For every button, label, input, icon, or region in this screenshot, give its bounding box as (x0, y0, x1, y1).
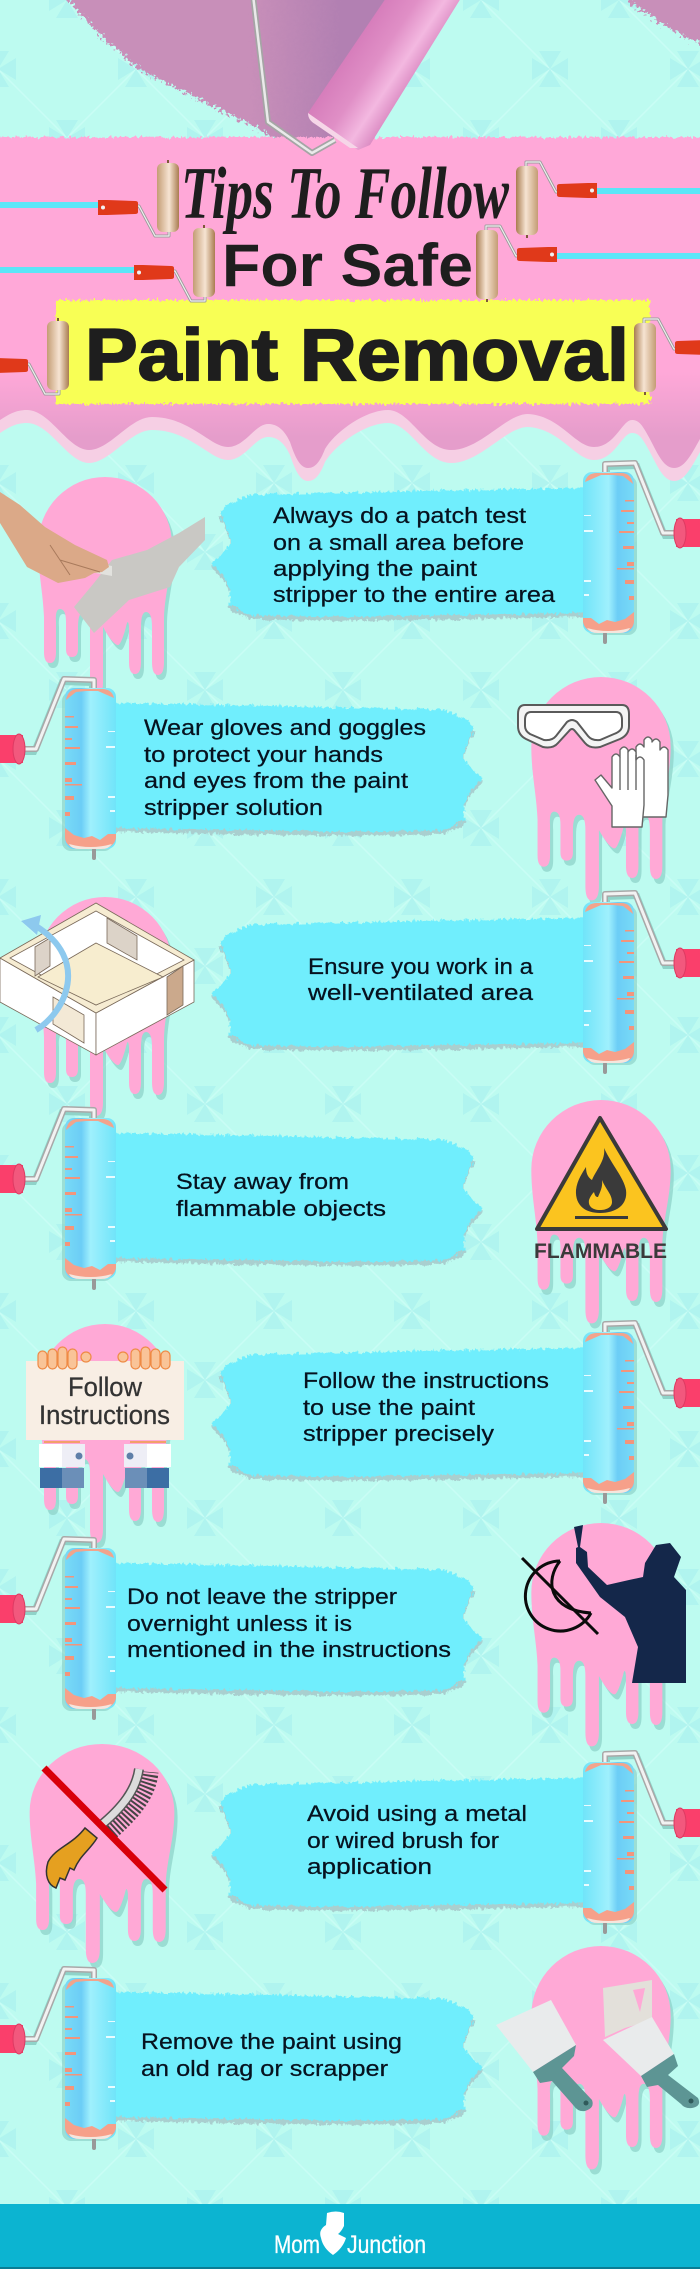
icon: sign held by hands (26, 1347, 184, 1488)
header pink band with drips (0, 137, 700, 481)
paint roller (0, 679, 116, 858)
paint splat (531, 677, 674, 905)
tip text: Remove the paint using (141, 2029, 402, 2054)
tip text (176, 1169, 386, 1221)
icon: wire brush (46, 1769, 150, 1888)
brush banner (211, 488, 587, 621)
title rollers (0, 160, 700, 395)
paint splat (531, 1100, 674, 1328)
paint splat (38, 897, 175, 1121)
icon: painter silhouette (574, 1525, 686, 1683)
tip text: stripper solution (144, 795, 323, 820)
paint roller (583, 463, 700, 642)
icon: flammable sign (537, 1118, 666, 1229)
tip text (273, 503, 556, 607)
icon: sign held by hands: Follow (68, 1372, 142, 1402)
panel: tip 4 flammable (0, 1100, 674, 1328)
logo: MomJunction: Junction (347, 2231, 426, 2259)
tip text: to protect your hands (144, 742, 383, 767)
paint roller (583, 893, 700, 1072)
icon: red cross line (44, 1768, 165, 1890)
tip text (307, 954, 534, 1005)
icon: goggles (518, 705, 629, 748)
tip text: to use the paint (303, 1395, 475, 1420)
panel: tip 6 overnight (0, 1523, 686, 1751)
tip text: applying the paint (273, 556, 477, 581)
title (85, 153, 629, 396)
paint roller (0, 1109, 116, 1288)
tip text: mentioned in the instructions (127, 1637, 451, 1662)
tip text (127, 1584, 451, 1662)
logo: MomJunction: Mom (274, 2231, 320, 2259)
tip text: overnight unless it is (127, 1611, 352, 1636)
blue lines behind title rollers (0, 188, 700, 273)
big paint roller (253, 0, 461, 153)
paint splat (531, 1523, 674, 1751)
brush banner (211, 1778, 587, 1911)
brush banner (211, 918, 587, 1051)
tip text: on a small area before (273, 530, 524, 555)
icon: scrapers (496, 1980, 699, 2111)
paint roller (0, 1969, 116, 2148)
paint roller (0, 1539, 116, 1718)
tip text (141, 2029, 402, 2081)
logo: MomJunction (274, 2212, 426, 2259)
tip text: well-ventilated area (307, 980, 534, 1005)
icon: ventilated room (0, 903, 194, 1055)
brush banner (211, 1348, 587, 1481)
tip text (303, 1368, 549, 1446)
panel: tip 2 gloves and goggles (0, 677, 674, 905)
icon: hand with trowel (0, 492, 205, 633)
tip text: Avoid using a metal (307, 1801, 527, 1826)
panel: tip 5 follow instructions (26, 1323, 700, 1548)
brush banner (107, 703, 483, 836)
tip text: Wear gloves and goggles (144, 715, 426, 740)
paint roller (583, 1753, 700, 1932)
tip text (307, 1801, 527, 1879)
arrow: airflow (21, 915, 68, 1030)
paint roller (583, 1323, 700, 1502)
tip text: application (307, 1854, 432, 1879)
title: Paint Removal (85, 315, 629, 396)
tip text: Follow the instructions (303, 1368, 549, 1393)
brush banner (107, 1992, 483, 2125)
tip text: Do not leave the stripper (127, 1584, 397, 1609)
tip text: flammable objects (176, 1196, 386, 1221)
top paint stroke (50, 0, 700, 155)
panel: tip 8 rag or scraper (0, 1946, 699, 2174)
brush banner (107, 1563, 483, 1696)
paint splat (30, 1744, 178, 1968)
tip text: or wired brush for (307, 1828, 499, 1853)
yellow title patch (56, 300, 650, 404)
icon: gloves (595, 737, 668, 827)
panel: tip 7 no metal brush (30, 1744, 700, 1968)
brush banner (107, 1133, 483, 1266)
panel: tip 1 patch test (0, 463, 700, 701)
tip text: Stay away from (176, 1169, 349, 1194)
tip text: Ensure you work in a (308, 954, 534, 979)
tip text (144, 715, 426, 820)
footer (0, 2204, 700, 2269)
paint splat (38, 477, 175, 701)
tip text: Always do a patch test (273, 503, 526, 528)
title: Tips To Follow (181, 153, 509, 235)
tip text: and eyes from the paint (144, 768, 408, 793)
icon: no overnight moon (522, 1558, 598, 1634)
icon: sign held by hands: Instructions (39, 1400, 170, 1430)
paint splat (38, 1324, 175, 1548)
title: For Safe (222, 232, 473, 299)
paint splat (531, 1946, 674, 2174)
label: flammable: FLAMMABLE (534, 1240, 667, 1263)
tip text: stripper precisely (303, 1421, 494, 1446)
tip text: an old rag or scrapper (141, 2056, 388, 2081)
panel: tip 3 ventilation (0, 893, 700, 1121)
tip text: stripper to the entire area (273, 582, 556, 607)
